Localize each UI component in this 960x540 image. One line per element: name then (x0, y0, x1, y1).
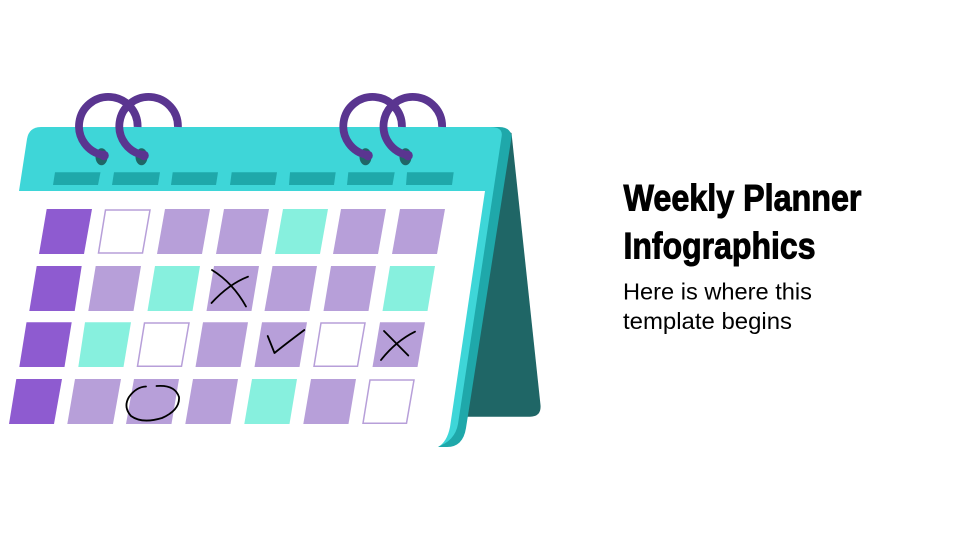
title: Weekly Planner (624, 176, 862, 218)
binding rings (79, 97, 442, 165)
calendar side edge (436, 127, 512, 447)
hand-drawn cross mark row 3 (381, 331, 415, 360)
ring holes (96, 148, 412, 165)
calendar teal header and front edge (19, 127, 502, 447)
calendar grid row 1 (39, 209, 445, 254)
ring ends (99, 151, 413, 160)
calendar grid row 3 (19, 322, 425, 367)
title: Infographics (624, 224, 816, 266)
subtitle: Here is where this (623, 278, 812, 304)
calendar back stand (460, 130, 541, 417)
calendar white sheet (0, 191, 485, 447)
hand-drawn cross mark row 2 (212, 270, 248, 306)
hand-drawn circle mark (126, 386, 179, 421)
header tabs (53, 172, 454, 185)
calendar illustration (0, 97, 541, 447)
calendar grid row 2 (29, 266, 435, 311)
calendar grid row 4 (9, 379, 414, 424)
subtitle: template begins (623, 308, 792, 334)
hand-drawn check mark (268, 330, 304, 353)
ring arcs (79, 97, 442, 155)
